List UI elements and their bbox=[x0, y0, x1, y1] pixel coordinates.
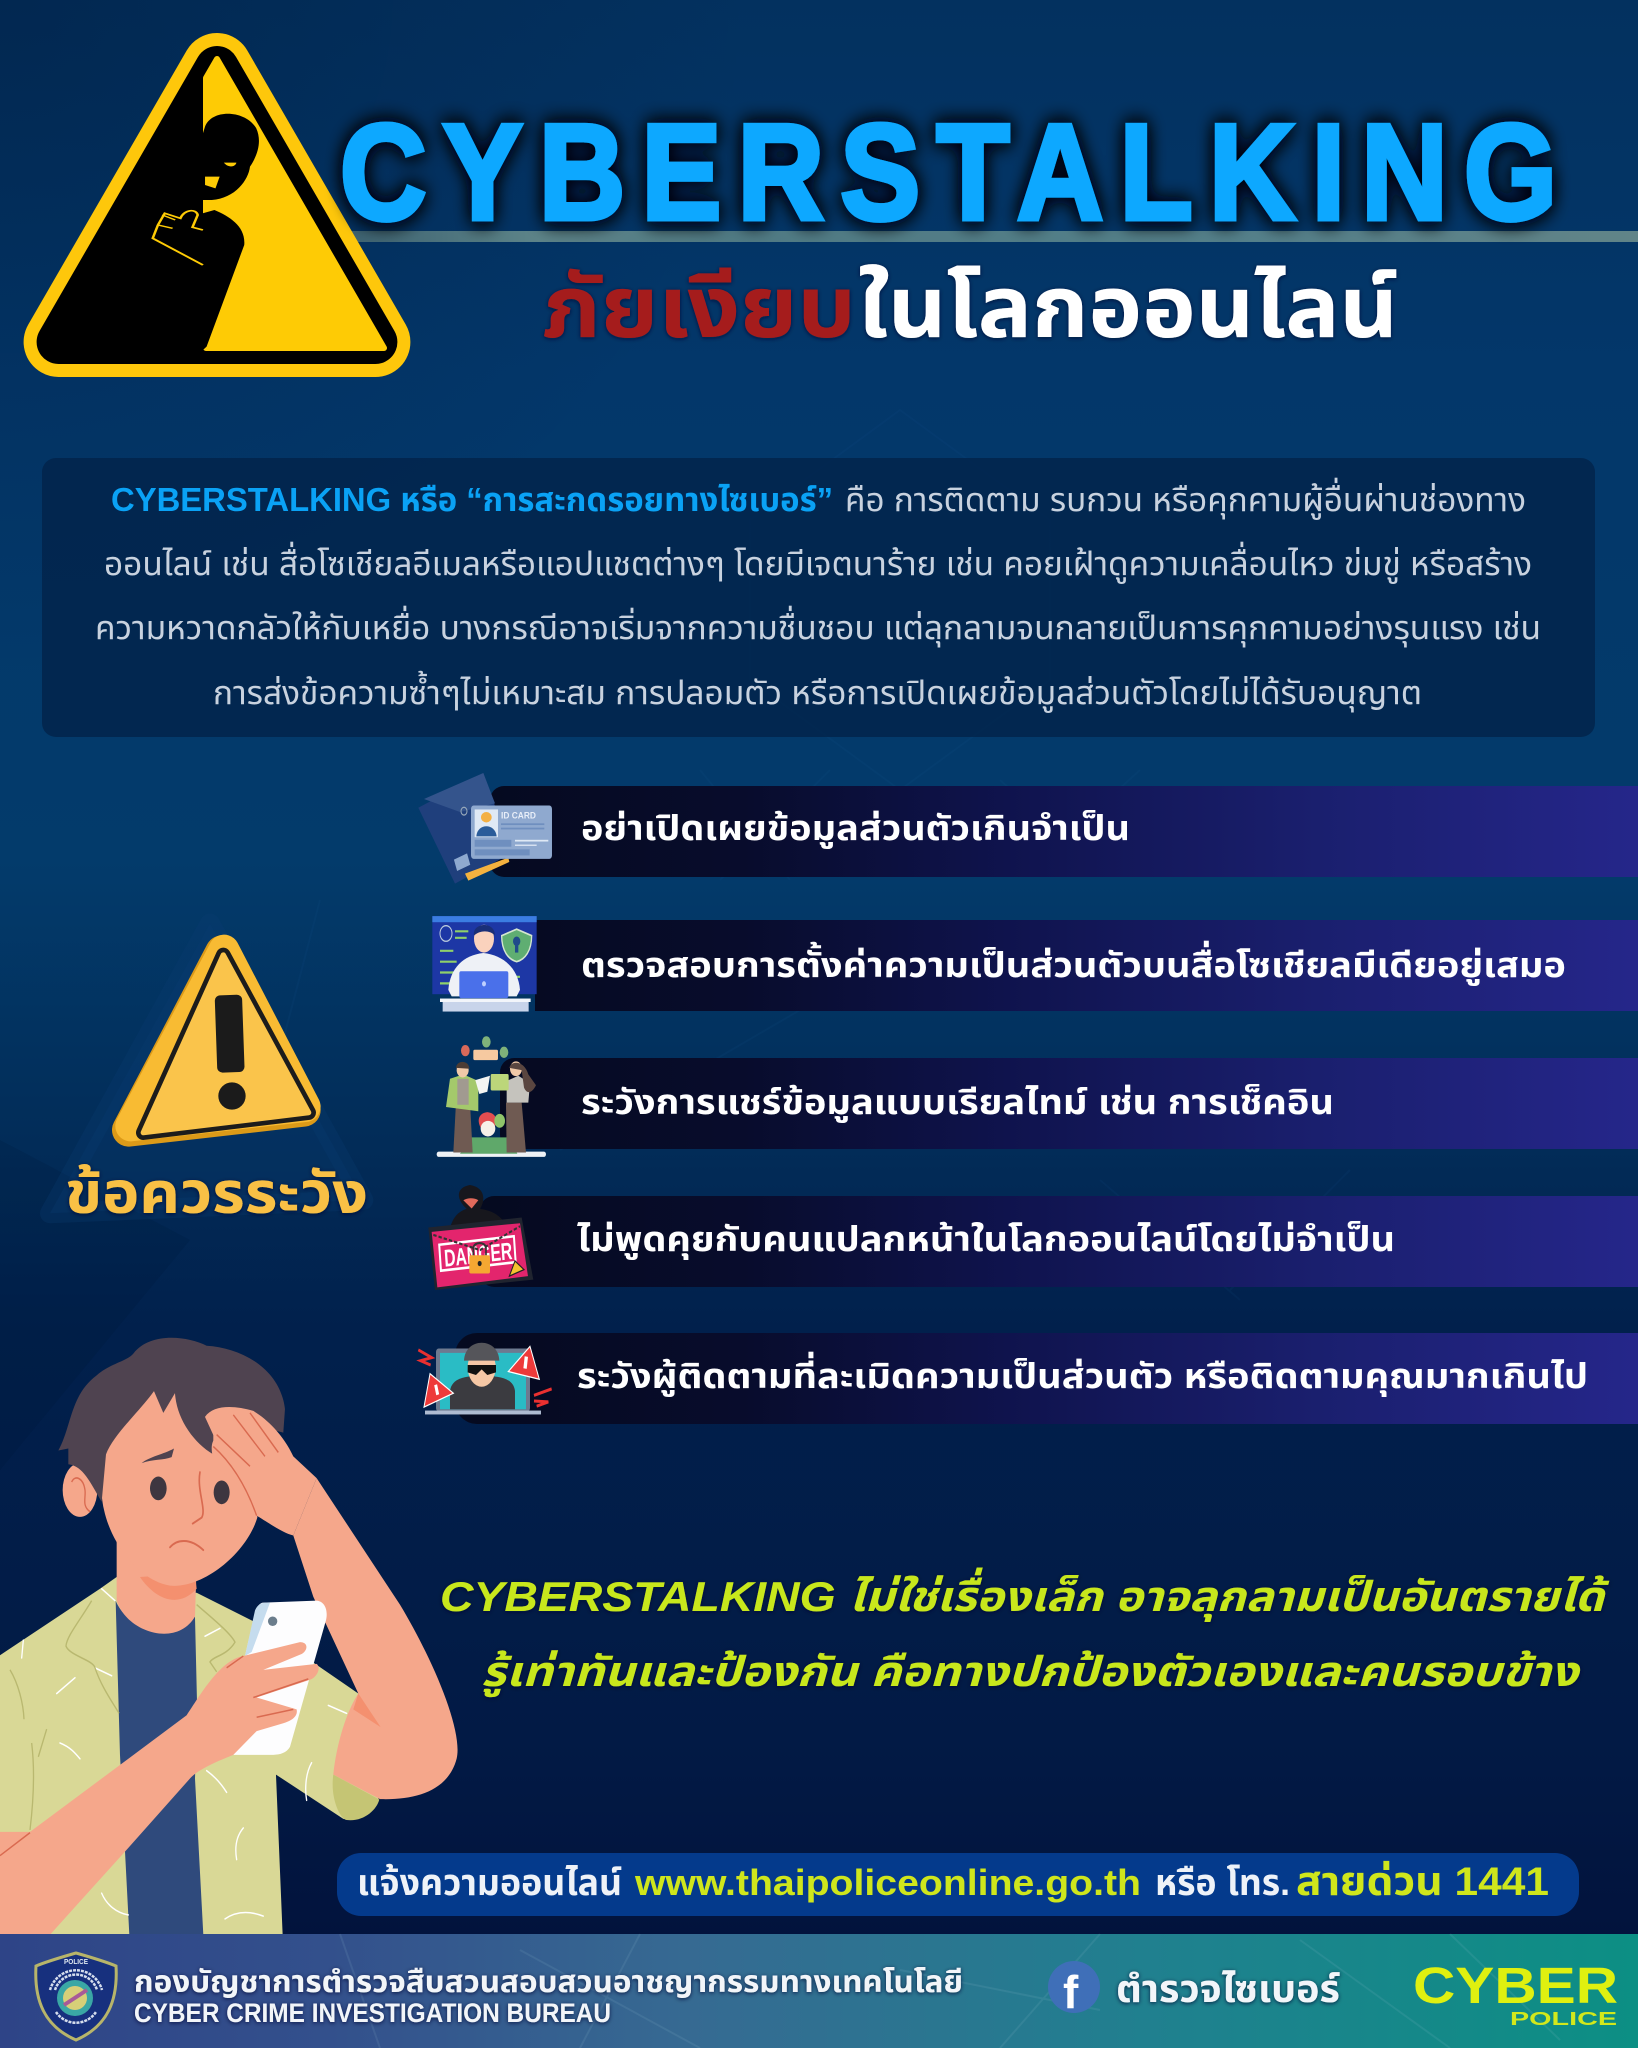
definition text: คือ การติดตาม รบกวน หรือคุกคามผู้อื่นผ่านช่องทาง bbox=[845, 477, 1526, 520]
facebook page name: ตำรวจไซเบอร์ bbox=[1116, 1969, 1340, 2011]
callout bbox=[440, 1567, 1610, 1698]
icon: id card and envelope bbox=[418, 773, 552, 884]
definition text: การส่งข้อความซ้ำๆไม่เหมาะสม การปลอมตัว หรือการเปิดเผยข้อมูลส่วนตัวโดยไม่ได้รับอนุญาต bbox=[213, 670, 1422, 713]
report pill: หรือ โทร. bbox=[1155, 1862, 1290, 1903]
definition text bbox=[95, 477, 1541, 713]
icon: hacker with danger sign: DANGER bbox=[443, 1237, 513, 1272]
report pill bbox=[337, 1853, 1579, 1916]
icon: masked thief on laptop bbox=[418, 1343, 552, 1414]
tip text: อย่าเปิดเผยข้อมูลส่วนตัวเกินจำเป็น bbox=[581, 809, 1130, 849]
definition text: ความหวาดกลัวให้กับเหยื่อ บางกรณีอาจเริ่มจากความชื่นชอบ แต่ลุกลามจนกลายเป็นการคุกคามอย่างรุนแรง เช่น bbox=[95, 605, 1541, 648]
definition text: CYBERSTALKING หรือ “การสะกดรอยทางไซเบอร์” bbox=[111, 481, 833, 518]
tip 2 bbox=[432, 916, 1638, 1012]
bureau name bbox=[134, 1966, 963, 2028]
icon: hacker with danger sign bbox=[428, 1185, 533, 1290]
icon: person with laptop and shield bbox=[432, 916, 537, 1012]
tip 1 bbox=[418, 773, 1638, 884]
tip text: ตรวจสอบการตั้งค่าความเป็นส่วนตัวบนสื่อโซเชียลมีเดียอยู่เสมอ bbox=[581, 940, 1566, 986]
background technology pattern bbox=[270, 410, 1350, 1300]
facebook icon: f bbox=[1063, 1966, 1079, 2018]
callout: CYBERSTALKING ไม่ใช่เรื่องเล็ก อาจลุกลามเป็นอันตรายได้ bbox=[440, 1567, 1610, 1622]
icon: warning sign bbox=[50, 923, 363, 1213]
bureau name: CYBER CRIME INVESTIGATION BUREAU bbox=[134, 1998, 611, 2028]
icon: two people sharing location bbox=[437, 1036, 546, 1157]
subtitle bbox=[542, 260, 1398, 356]
report pill: แจ้งความออนไลน์ bbox=[357, 1862, 622, 1903]
report pill: www.thaipoliceonline.go.th bbox=[634, 1862, 1141, 1903]
tip text: ไม่พูดคุยกับคนแปลกหน้าในโลกออนไลน์โดยไม่จำเป็น bbox=[577, 1220, 1395, 1260]
icon: stalker warning triangle bbox=[59, 59, 384, 350]
report pill: สายด่วน 1441 bbox=[1296, 1859, 1549, 1904]
facebook icon bbox=[1048, 1961, 1100, 2018]
bureau name: กองบัญชาการตำรวจสืบสวนสอบสวนอาชญากรรมทางเทคโนโลยี bbox=[134, 1966, 963, 1999]
police shield emblem: POLICE bbox=[64, 1959, 88, 1966]
horizontal rule under title bbox=[345, 231, 1638, 242]
police shield emblem bbox=[36, 1953, 116, 2040]
callout: รู้เท่าทันและป้องกัน คือทางปกป้องตัวเองและคนรอบข้าง bbox=[481, 1648, 1581, 1698]
tip text: ระวังการแชร์ข้อมูลแบบเรียลไทม์ เช่น การเช็คอิน bbox=[581, 1083, 1334, 1123]
character: worried man with phone bbox=[0, 1338, 458, 1935]
tip 4 bbox=[428, 1185, 1638, 1290]
subtitle: ในโลกออนไลน์ bbox=[858, 260, 1398, 356]
definition text: ออนไลน์ เช่น สื่อโซเชียลอีเมลหรือแอปแชตต่างๆ โดยมีเจตนาร้าย เช่น คอยเฝ้าดูความเคลื่อนไหว ข่มขู่ หรือสร้าง bbox=[104, 541, 1532, 584]
warning heading: ข้อควรระวัง bbox=[65, 1161, 368, 1226]
tip text: ระวังผู้ติดตามที่ละเมิดความเป็นส่วนตัว หรือติดตามคุณมากเกินไป bbox=[577, 1351, 1588, 1397]
cyber police logo: POLICE bbox=[1510, 2009, 1617, 2029]
title: CYBERSTALKING bbox=[340, 97, 1557, 249]
cyber police logo bbox=[1413, 1957, 1618, 2029]
cyber police logo: CYBER bbox=[1413, 1957, 1618, 2014]
footer bbox=[0, 1934, 1638, 2048]
icon: id card and envelope: ID CARD bbox=[501, 810, 536, 821]
tip 3 bbox=[437, 1036, 1638, 1157]
subtitle: ภัยเงียบ bbox=[542, 260, 856, 356]
tip 5 bbox=[418, 1333, 1638, 1424]
panel: definition bbox=[42, 458, 1595, 737]
